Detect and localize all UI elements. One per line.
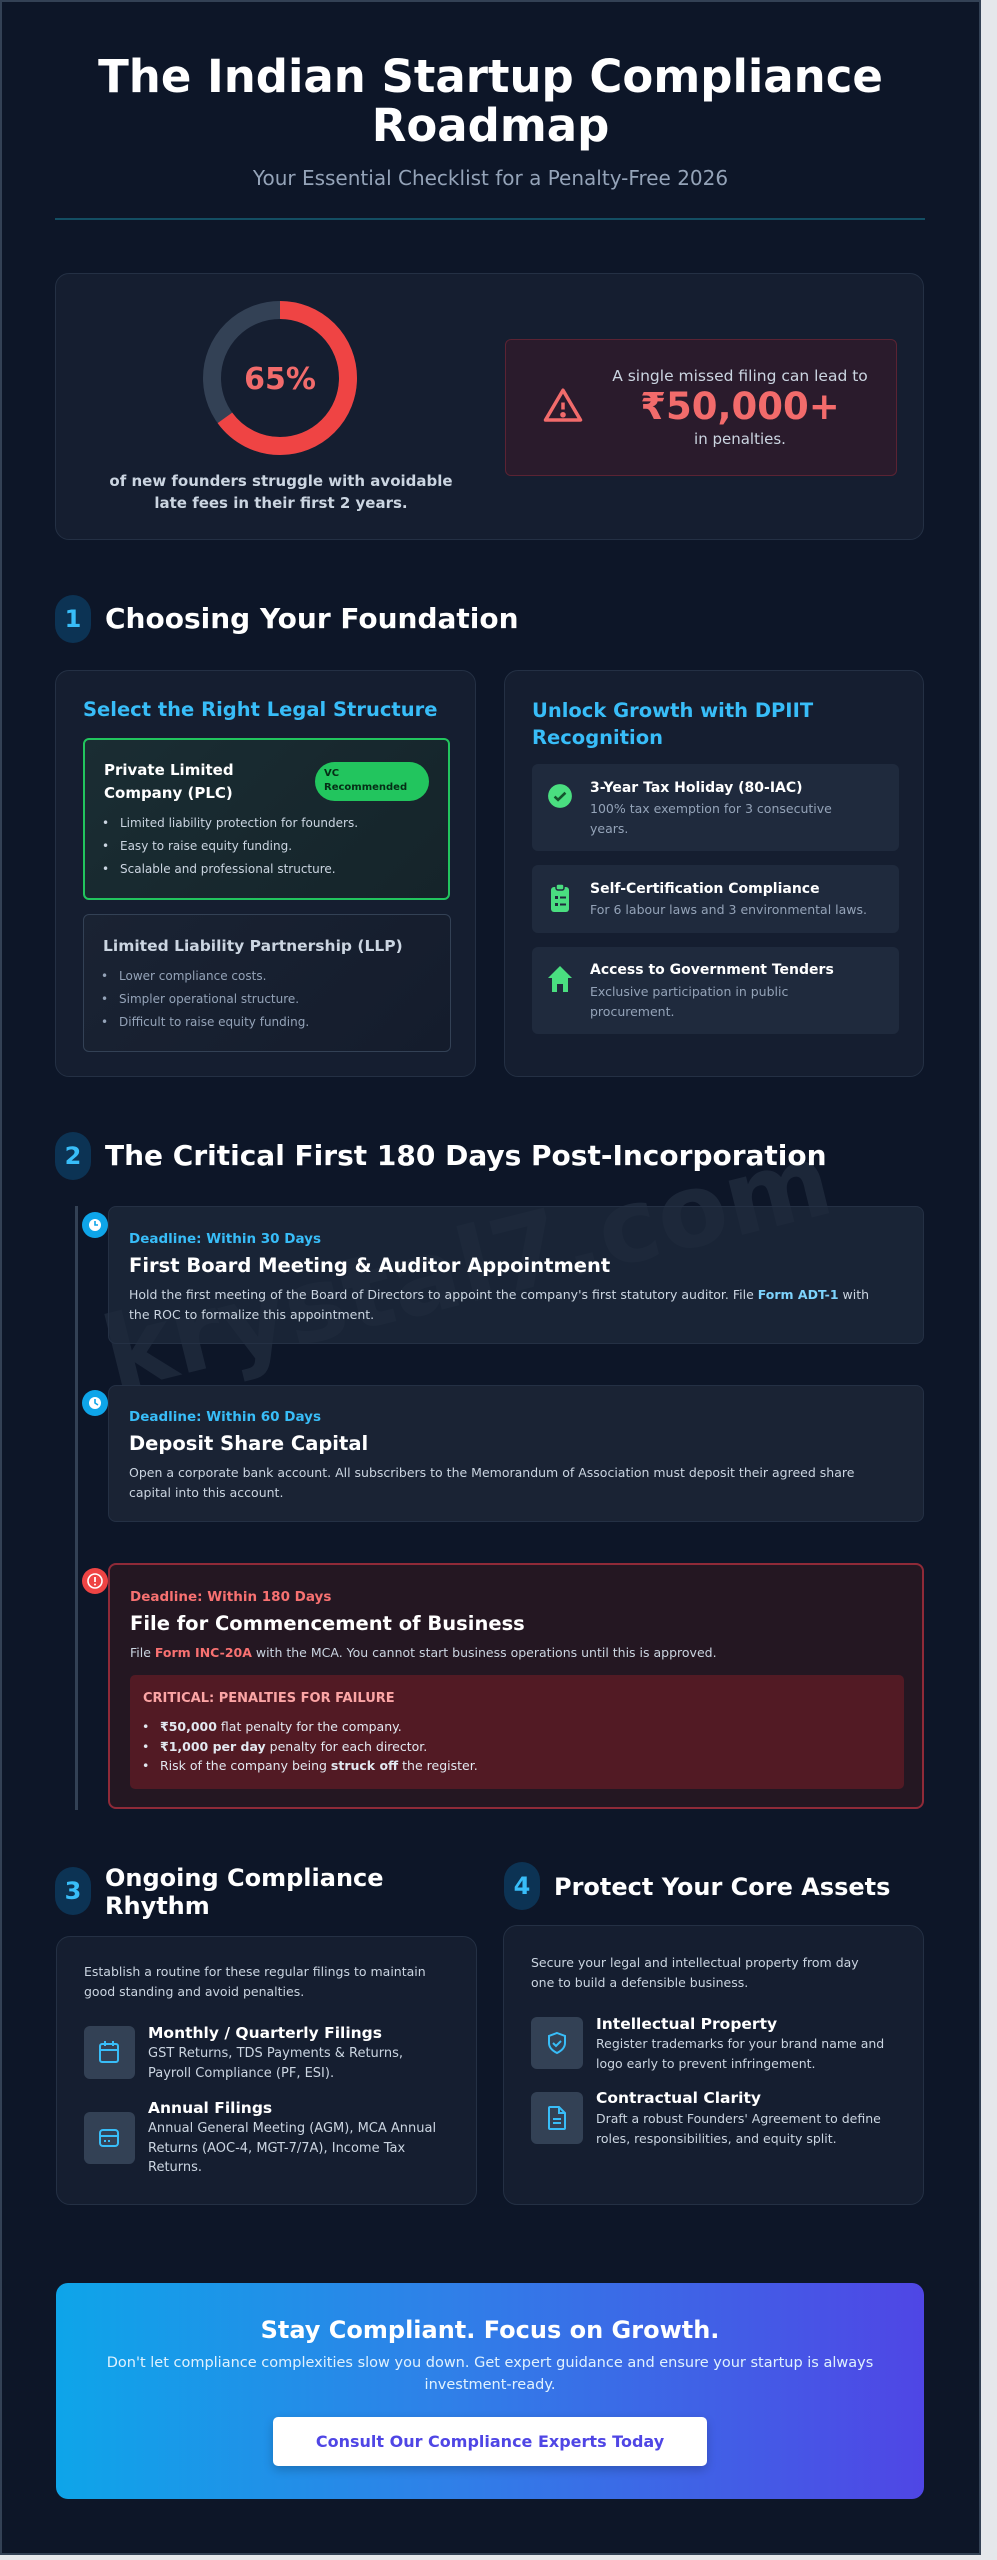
timeline item 1: Deadline: Within 30 Days xyxy=(129,1231,321,1247)
CTA banner: Stay Compliant. Focus on Growth. xyxy=(261,2316,719,2344)
CTA button: Consult Our Compliance Experts Today xyxy=(316,2432,664,2451)
panel: ongoing compliance: GST Returns, TDS Payments & Returns, Payroll Compliance (PF, ESI). xyxy=(148,2046,403,2080)
panel: ongoing compliance: Monthly / Quarterly Filings xyxy=(148,2024,382,2042)
item: self-certification xyxy=(532,865,899,933)
timeline item 3: Deadline: Within 180 Days xyxy=(130,1589,331,1605)
timeline item 1: First Board Meeting & Auditor Appointment xyxy=(129,1254,610,1277)
panel: legal structure: Select the Right Legal Structure xyxy=(83,698,437,721)
donut chart xyxy=(203,301,357,455)
donut chart: 65% xyxy=(244,362,316,397)
callout: penalties: ₹50,000 flat penalty for the company. xyxy=(160,1719,402,1734)
timeline line xyxy=(75,1206,78,1810)
panel: DPIIT: Unlock Growth with DPIIT xyxy=(532,699,813,722)
callout: penalties xyxy=(130,1675,904,1789)
item: tenders: Exclusive participation in public procurement. xyxy=(590,984,788,1019)
item: self-certification: For 6 labour laws and 3 environmental laws. xyxy=(590,902,867,917)
callout: penalties: Risk of the company being struck off the register. xyxy=(160,1758,478,1773)
VC badge xyxy=(315,762,429,801)
panel: DPIIT xyxy=(504,670,924,1077)
PLC box xyxy=(83,738,450,900)
stat caption: of new founders struggle with avoidable xyxy=(109,472,453,490)
subtitle: Your Essential Checklist for a Penalty-Free 2026 xyxy=(253,166,728,190)
callout: penalty: ₹50,000+ xyxy=(640,385,840,428)
callout: penalty: A single missed filing can lead to xyxy=(612,367,868,385)
section 4 heading: Protect Your Core Assets xyxy=(554,1873,890,1901)
callout: penalties: ₹1,000 per day penalty for each director. xyxy=(160,1738,427,1754)
callout: penalty xyxy=(505,339,897,476)
panel: protect assets: Intellectual Property xyxy=(596,2015,777,2033)
timeline item 3: File for Commencement of Business xyxy=(130,1612,525,1635)
callout: penalty: in penalties. xyxy=(694,430,786,448)
panel: ongoing compliance: Establish a routine for these regular filings to maintain good standing and avoid penalties. xyxy=(84,1964,426,1999)
LLP box: Limited Liability Partnership (LLP) xyxy=(103,937,403,955)
LLP box xyxy=(83,914,451,1052)
item: tax holiday: 100% tax exemption for 3 consecutive years. xyxy=(590,801,832,836)
panel: ongoing compliance: Annual General Meeting (AGM), MCA Annual Returns (AOC-4, MGT-7/7A), Income Tax Returns. xyxy=(148,2121,436,2175)
LLP box: Simpler operational structure. xyxy=(119,992,299,1006)
PLC box: Private Limited xyxy=(104,761,234,779)
title: The Indian Startup Compliance xyxy=(98,50,883,103)
icon: clock 2 xyxy=(82,1390,108,1416)
stat caption xyxy=(109,472,453,512)
section 2 heading: The Critical First 180 Days Post-Incorporation xyxy=(105,1139,827,1172)
timeline item 2 xyxy=(108,1385,924,1522)
panel: legal structure xyxy=(55,670,476,1077)
watermark: krystal7.com xyxy=(92,1120,843,1415)
icon: alert xyxy=(82,1568,108,1594)
item: self-certification: Self-Certification Compliance xyxy=(590,881,820,897)
icon: calendar xyxy=(84,2026,135,2079)
VC badge: VC xyxy=(324,768,339,779)
PLC box: Scalable and professional structure. xyxy=(120,862,336,876)
panel: ongoing compliance xyxy=(56,1936,477,2205)
CTA button xyxy=(273,2417,707,2466)
panel: protect assets: Register trademarks for your brand name and logo early to prevent infringement. xyxy=(596,2036,884,2070)
panel: DPIIT: Recognition xyxy=(532,726,663,749)
PLC box: Easy to raise equity funding. xyxy=(120,839,292,853)
panel: ongoing compliance: Annual Filings xyxy=(148,2099,272,2117)
timeline item 3 xyxy=(108,1563,924,1809)
PLC box: Limited liability protection for founders. xyxy=(120,816,358,830)
VC badge: Recommended xyxy=(324,782,407,793)
LLP box: Lower compliance costs. xyxy=(119,969,266,983)
section 4 heading: 4 xyxy=(514,1872,530,1900)
section 1 heading: 1 xyxy=(65,605,81,633)
panel: protect assets: Contractual Clarity xyxy=(596,2089,761,2107)
timeline item 2: Deadline: Within 60 Days xyxy=(129,1409,321,1425)
timeline item 1: Hold the first meeting of the Board of Directors to appoint the company's first statutory auditor. File Form ADT-1 with the ROC to formalize this appointment. xyxy=(129,1287,869,1322)
item: tax holiday: 3-Year Tax Holiday (80-IAC) xyxy=(590,780,803,796)
panel: stats xyxy=(55,273,924,540)
timeline item 3: File Form INC-20A with the MCA. You cannot start business operations until this is approved. xyxy=(130,1645,717,1660)
section 3 heading: Ongoing Compliance xyxy=(105,1864,384,1892)
PLC box: Company (PLC) xyxy=(104,784,233,802)
icon: clock 1 xyxy=(82,1212,108,1238)
section 3 heading: Rhythm xyxy=(105,1892,210,1920)
section 1 heading xyxy=(55,595,519,643)
section 2 heading: 2 xyxy=(65,1142,81,1170)
stat caption: late fees in their first 2 years. xyxy=(154,494,408,512)
item: tenders xyxy=(532,947,899,1034)
LLP box: Difficult to raise equity funding. xyxy=(119,1015,309,1029)
timeline item 2: Deposit Share Capital xyxy=(129,1432,368,1455)
item: tenders: Access to Government Tenders xyxy=(590,962,834,978)
timeline item 2: Open a corporate bank account. All subscribers to the Memorandum of Association must deposit their agreed share capital into this account. xyxy=(129,1465,854,1500)
title: Roadmap xyxy=(372,99,609,152)
section 4 heading xyxy=(504,1862,890,1910)
section 1 heading: Choosing Your Foundation xyxy=(105,602,519,635)
icon: warning xyxy=(544,388,582,422)
icon: shield xyxy=(531,2017,583,2069)
section 3 heading: 3 xyxy=(65,1877,81,1905)
icon: document xyxy=(531,2092,583,2144)
panel: protect assets xyxy=(503,1925,924,2205)
title xyxy=(98,50,883,152)
section 3 heading xyxy=(55,1864,384,1920)
section 2 heading xyxy=(55,1132,827,1180)
timeline item 1 xyxy=(108,1206,924,1344)
icon: card xyxy=(84,2112,135,2164)
panel: protect assets: Draft a robust Founders' Agreement to define roles, responsibilities, and equity split. xyxy=(596,2111,881,2146)
callout: penalties: CRITICAL: PENALTIES FOR FAILURE xyxy=(143,1691,395,1706)
CTA banner: Don't let compliance complexities slow you down. Get expert guidance and ensure your startup is always investment-ready. xyxy=(107,2355,873,2393)
CTA banner xyxy=(56,2283,924,2499)
panel: protect assets: Secure your legal and intellectual property from day one to build a defensible business. xyxy=(531,1955,859,1990)
item: tax holiday xyxy=(532,764,899,851)
